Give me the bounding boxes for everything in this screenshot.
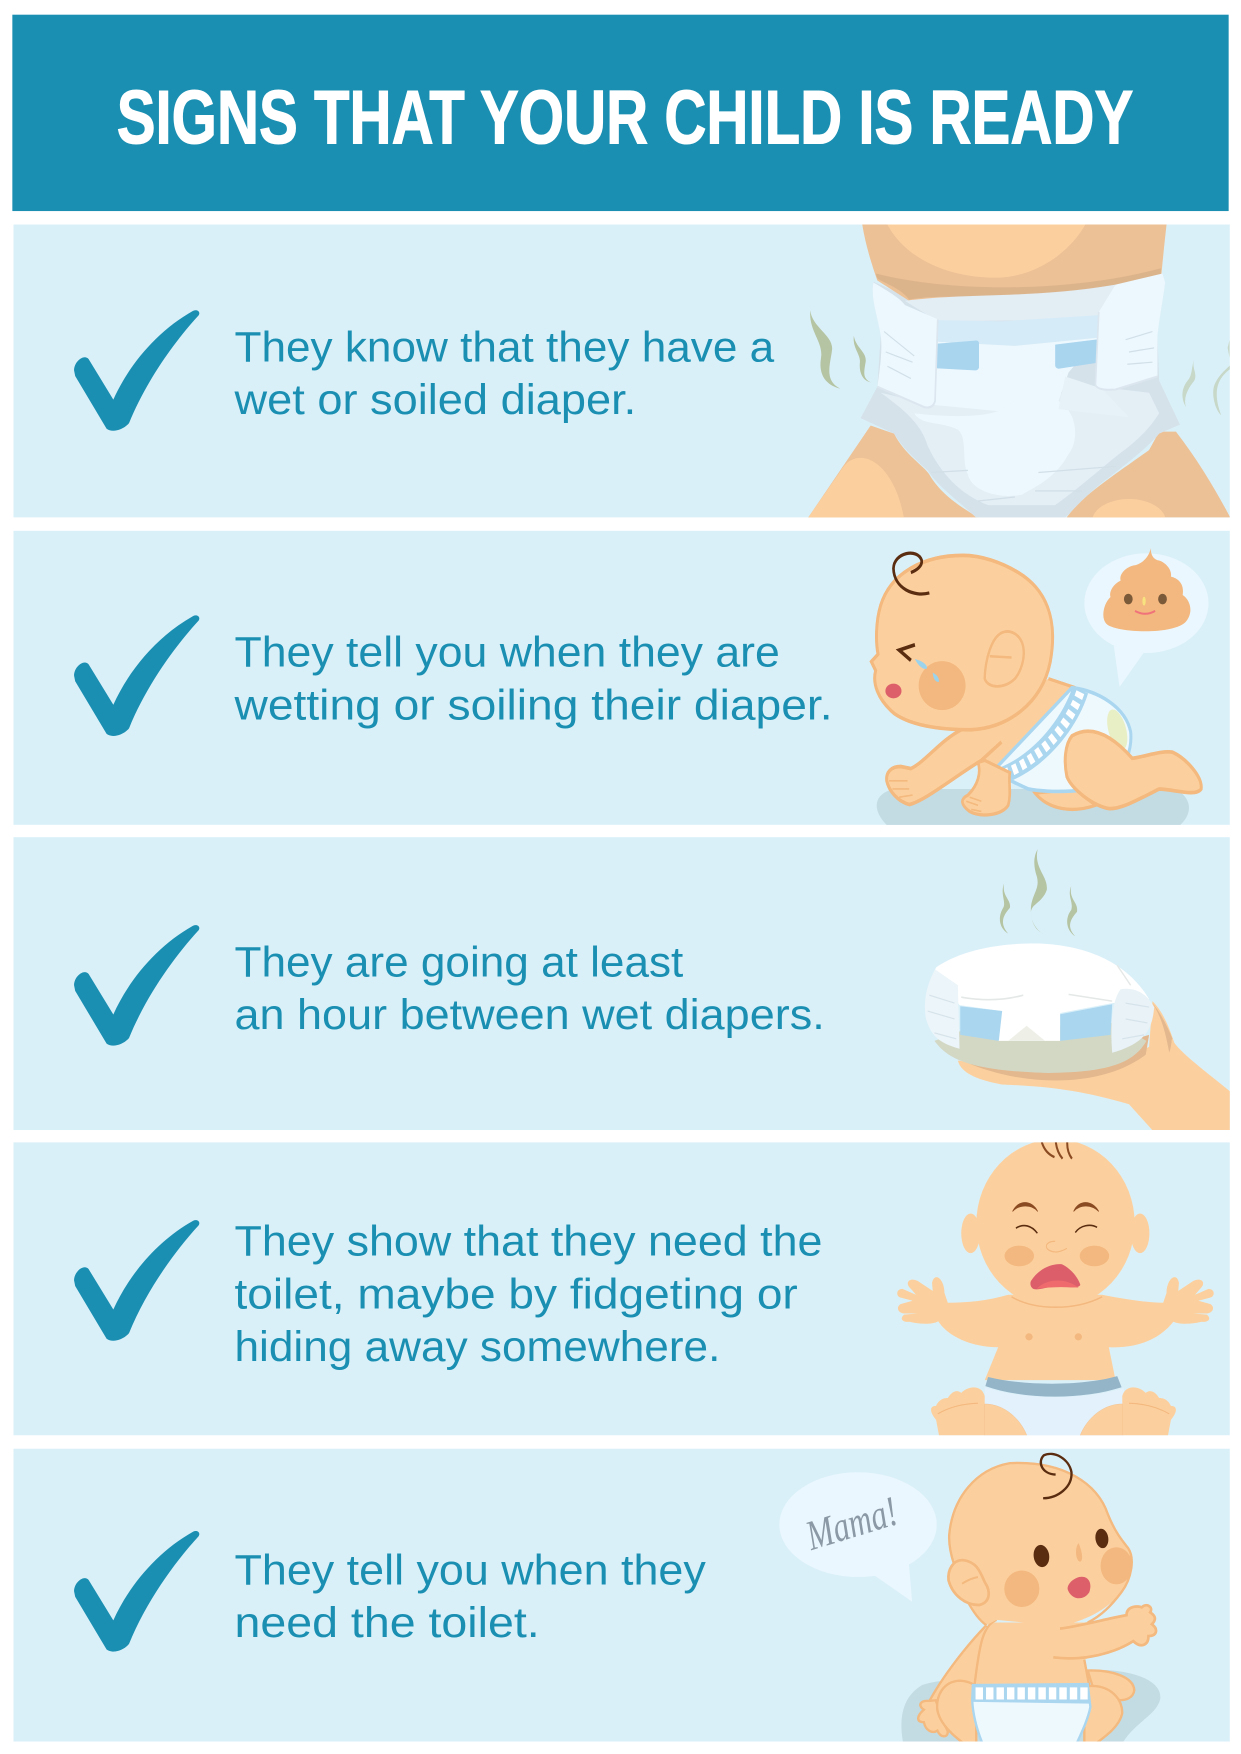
panel: needs the toilet fidgeting [13, 1139, 1230, 1438]
text: sign three [235, 938, 825, 1039]
baby head [948, 1454, 1132, 1626]
illustration: hand holding a soiled diaper [925, 849, 1231, 1132]
text: sign one: wet or soiled diaper. [233, 376, 636, 424]
text: sign four: They show that they need the [235, 1218, 822, 1266]
baby head [871, 553, 1053, 730]
speech bubble: Mama: Mama! [800, 1488, 903, 1560]
text: sign four: hiding away somewhere. [235, 1323, 720, 1371]
icon: checkmark [74, 310, 199, 431]
illustration: diaper on a baby [807, 225, 1231, 544]
text: sign three: an hour between wet diapers. [235, 991, 825, 1039]
icon: checkmark [74, 615, 199, 736]
panel: an hour between wet diapers [13, 837, 1231, 1132]
illustration: crying baby with raised arms [897, 1139, 1214, 1438]
text: sign three: They are going at least [235, 938, 683, 986]
text: sign two: wetting or soiling their diaper. [233, 681, 833, 729]
text: sign two [233, 629, 833, 729]
icon: checkmark [74, 1531, 199, 1652]
speech bubble with poop [1084, 548, 1208, 687]
text: sign five [235, 1546, 706, 1647]
illustration: crawling baby with poop bubble [871, 548, 1208, 826]
text: sign four: toilet, maybe by fidgeting or [235, 1270, 798, 1318]
text: sign two: They tell you when they are [235, 629, 780, 677]
title banner [12, 15, 1229, 211]
icon: checkmark [74, 925, 199, 1046]
panel: tells you when wetting or soiling [13, 531, 1230, 826]
baby head [976, 1139, 1135, 1308]
speech bubble: Mama [779, 1472, 937, 1602]
icon: checkmark [74, 1220, 199, 1341]
text: sign five: They tell you when they [235, 1546, 706, 1594]
panel: tells you they need the toilet [13, 1449, 1230, 1753]
text: sign four [235, 1218, 822, 1371]
illustration: sitting baby saying Mama [779, 1454, 1160, 1753]
text: sign one: They know that they have a [235, 323, 775, 371]
panel: wet or soiled diaper [13, 225, 1231, 544]
text: sign one [233, 323, 775, 424]
text: sign five: need the toilet. [235, 1599, 540, 1647]
